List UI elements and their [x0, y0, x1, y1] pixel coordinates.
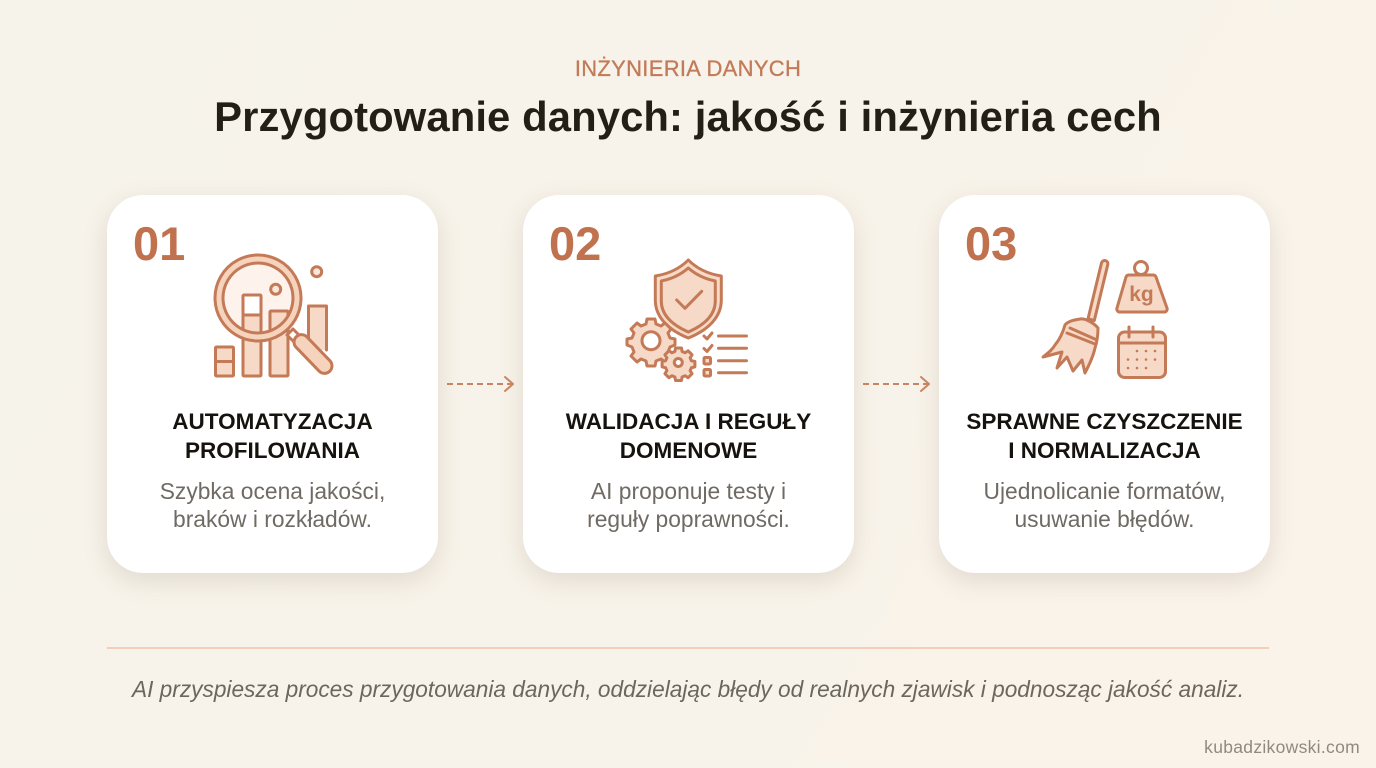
step number 02: 02	[549, 217, 601, 270]
step 1 heading: PROFILOWANIA	[185, 438, 360, 463]
title: Przygotowanie danych: jakość i inżynieria cech	[214, 93, 1162, 140]
step 2 description	[587, 478, 790, 532]
icon: magnifier over bar chart	[215, 255, 335, 376]
closing statement: AI przyspiesza proces przygotowania danych, oddzielając błędy od realnych zjawisk i podnosząc jakość analiz.	[132, 676, 1244, 702]
step 3 heading: I NORMALIZACJA	[1008, 438, 1201, 463]
step 1 description	[160, 478, 385, 532]
step number 03: 03	[965, 217, 1017, 270]
calendar dots	[1127, 350, 1156, 369]
panel: step 3	[939, 195, 1270, 573]
eyebrow heading: INŻYNIERIA DANYCH	[575, 56, 801, 81]
step 2 heading: WALIDACJA I REGUŁY	[566, 409, 811, 434]
step 2 description: reguły poprawności.	[587, 506, 790, 532]
step 3 description	[983, 478, 1226, 532]
icon label: kg: kg	[1129, 283, 1154, 306]
step number 01: 01	[133, 217, 185, 270]
watermark: kubadzikowski.com	[1204, 737, 1360, 757]
panel: step 1	[107, 195, 438, 573]
step 1 heading	[172, 409, 373, 463]
step 2 heading: DOMENOWE	[620, 438, 757, 463]
step 2 heading	[566, 409, 811, 463]
step 3 description: Ujednolicanie formatów,	[983, 478, 1226, 504]
arrow: step 1 to step 2	[447, 377, 513, 391]
step 3 heading: SPRAWNE CZYSZCZENIE	[966, 409, 1243, 434]
step 1 description: braków i rozkładów.	[173, 506, 372, 532]
step 2 description: AI proponuje testy i	[591, 478, 786, 504]
step 3 heading	[966, 409, 1243, 463]
step 1 heading: AUTOMATYZACJA	[172, 409, 373, 434]
step 3 description: usuwanie błędów.	[1014, 506, 1194, 532]
icon: broom, weight and calendar	[1043, 261, 1167, 378]
panel: step 2	[523, 195, 854, 573]
icon: shield, gears and checklist	[627, 260, 746, 380]
divider	[107, 647, 1269, 649]
step 1 description: Szybka ocena jakości,	[160, 478, 385, 504]
arrow: step 2 to step 3	[863, 377, 929, 391]
